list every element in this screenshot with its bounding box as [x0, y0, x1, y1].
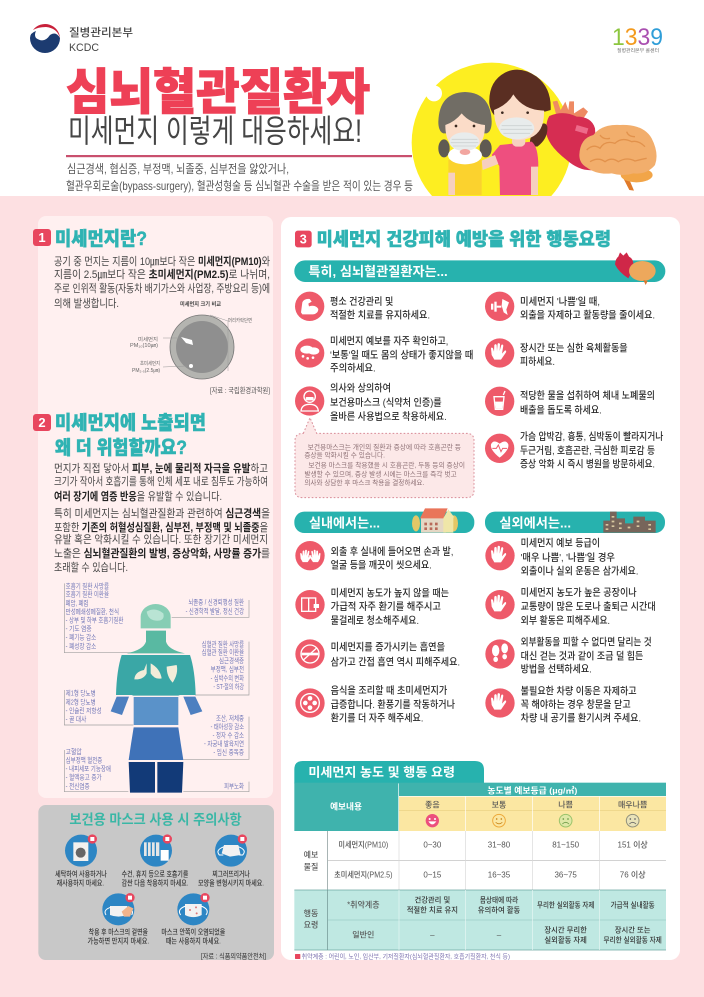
text block 1: 의해 발생합니다. [54, 296, 119, 310]
icon: face bad [559, 814, 572, 827]
label: pregnancy: 조산, 저체중 [216, 714, 244, 723]
icon: crumpled mask [215, 834, 247, 867]
tip: manage health: 적절한 치료를 유지하세요. [330, 308, 430, 321]
table rows: actions: 건강관리 및 [414, 896, 450, 905]
section 3 lower: indoor and outdoor [294, 508, 665, 725]
tip: forecast [295, 334, 473, 375]
badge 1: 1 [38, 230, 46, 245]
tip: mask with doctor: 보건용마스크 (식약처 인증)를 [330, 396, 442, 409]
tip: forecast: 미세먼지 예보를 자주 확인하고, [330, 334, 448, 347]
heading 3: 미세먼지 건강피해 예방을 위한 행동요령 [317, 230, 611, 250]
chart: particle size comparison: PM₂.₅(2.5㎛) [132, 368, 160, 374]
tip: water [485, 387, 655, 416]
panel: section 2 why dangerous [33, 412, 270, 574]
icon: hand [485, 688, 515, 718]
tip: no smoking: 삼가고 간접 흡연 역시 피해주세요. [331, 656, 460, 669]
callout: mask warning: 보건용 마스크를 착용했을 시 호흡곤란, 두통 등의 증상이 [308, 461, 465, 470]
callout: mask warning: 증상을 악화시킬 수 있습니다. [304, 451, 385, 460]
tip: ventilate: 물걸레로 청소해주세요. [331, 614, 419, 627]
table rows: actions: – [430, 931, 435, 940]
icon: soiled mask [177, 893, 210, 925]
table rows: actions: 행동 [304, 908, 318, 918]
label: diabetes: 제2형 당뇨병 [66, 697, 96, 706]
label: cardiovascular: 심혈관 질환 이환율 [202, 648, 244, 657]
table header: 좋음 [425, 800, 440, 809]
tip: manage health [295, 292, 430, 321]
tip: wash [295, 541, 453, 571]
text block 1 [54, 255, 270, 310]
child [438, 92, 492, 195]
badge 1 [33, 229, 51, 246]
table rows: actions: 가급적 실내활동 [611, 901, 655, 910]
label: respiratory [66, 581, 124, 650]
label: pregnancy: - 임신 중독증 [213, 748, 244, 757]
icon: emblem [30, 23, 60, 53]
tip: refrain outdoors: 미세먼지 예보 등급이 [521, 538, 600, 550]
source 1: [자료 : 국립환경과학원] [210, 385, 270, 395]
source: mask: [자료 : 식품의약품안전처] [201, 951, 266, 960]
label: respiratory: - 상부 및 하부 호흡기질환 [66, 616, 124, 625]
table footnote: 취약계층 : 어린이, 노인, 임산부, 기저질환자(심뇌혈관질환자, 호흡기질환자, 천식 등) [302, 952, 510, 961]
table header: 예보내용 [330, 801, 362, 812]
tip: vehicle: 불필요한 차량 이동은 자제하고 [521, 684, 637, 697]
table rows: pollutants: 미세먼지(PM10) [338, 840, 389, 850]
table tab heading: 미세먼지 농도 및 행동 요령 [308, 766, 455, 780]
table rows: pollutants: 0~30 [423, 841, 442, 850]
callout: mask warning: 발생할 수 있으며, 증상 발생 시에는 마스크를 즉각 벗고 [304, 470, 457, 479]
label: pregnancy [204, 714, 244, 757]
caution: covering: 감싼 다음 착용하지 마세요. [122, 878, 188, 887]
callout: mask warning: 의사와 상담한 후 마스크 착용을 결정하세요. [304, 478, 424, 487]
tip: mask with doctor: 의사와 상의하여 [330, 382, 391, 395]
tip: avoid roads: 교통량이 많은 도로나 출퇴근 시간대 [521, 600, 656, 613]
heading 2: 왜 더 위험할까요? [55, 437, 187, 459]
tip: manage health: 평소 건강관리 및 [330, 295, 393, 308]
label: respiratory: - 기도 염증 [66, 624, 92, 633]
icon: heart pulse [485, 434, 514, 463]
tip: mask with doctor [295, 382, 447, 423]
icon: washing hands [295, 541, 325, 570]
icon: stop hand [485, 338, 514, 368]
tip: avoid roads: 외부 활동은 피해주세요. [521, 614, 610, 627]
caution: covering: 수건, 휴지 등으로 호흡기를 [122, 869, 189, 878]
label: blood: - 내피세포 기능장애 [66, 764, 111, 773]
tip: reduce activity: 미세먼지 '나쁨'일 때, [520, 295, 600, 308]
tip: avoid roads: 미세먼지 농도가 높은 공장이나 [521, 586, 637, 599]
human body figure [111, 604, 202, 793]
label: diabetes [66, 689, 102, 724]
panel: section 1 what is fine dust [33, 228, 270, 395]
table rows: pollutants: 0~15 [423, 871, 442, 880]
caution: washing [55, 869, 107, 887]
table rows: pollutants: 초미세먼지(PM2.5) [334, 870, 393, 880]
table rows: actions: 장시간 또는 [615, 926, 651, 935]
tip: refrain outdoors: 외출이나 실외 운동은 삼가세요. [521, 565, 638, 577]
table rows: pollutants: 예보 [304, 850, 318, 860]
table rows: actions: *취약계층 [347, 900, 380, 910]
tip: cooking: 급증합니다. 환풍기를 작동하거나 [331, 698, 455, 711]
icon: window [295, 590, 325, 619]
table tab heading [294, 761, 484, 783]
label: diabetes: - 인슐린 저항성 [66, 706, 102, 715]
text block 2: 유발 혹은 악화시킬 수 있습니다. 또한 장기간 미세먼지 [54, 532, 268, 546]
table rows: pollutants: 76 이상 [620, 870, 646, 880]
tip: ventilate: 가급적 자주 환기를 해주시고 [331, 600, 441, 613]
subtitle: 미세먼지 이렇게 대응하세요! [68, 113, 362, 149]
tip: refrain outdoors [485, 538, 638, 577]
table rows: actions: 무리한 실외활동 자제 [603, 935, 662, 944]
label: blood: 고혈압 [66, 747, 82, 756]
caution: touching [87, 927, 149, 946]
tip: water: 적당한 물을 섭취하여 체내 노폐물의 [520, 389, 655, 402]
icon: fan [295, 688, 325, 718]
tip: reduce activity: 외출을 자제하고 활동량을 줄이세요. [520, 308, 655, 321]
table rows: actions [294, 890, 666, 950]
table header [294, 783, 666, 831]
icon: no smoking [295, 639, 325, 669]
tip: wash: 외출 후 실내에 들어오면 손과 발, [331, 546, 453, 558]
banner: patients: 특히, 심뇌혈관질환자는... [308, 263, 448, 279]
target description: 혈관우회로술(bypass-surgery), 혈관성형술 등 심뇌혈관 수술을 받은 적이 있는 경우 등 [66, 179, 413, 193]
heading 2: 미세먼지에 노출되면 [55, 412, 206, 434]
tip: vehicle [485, 684, 641, 725]
tip: ventilate [295, 588, 449, 627]
table rows: actions: 적절한 치료 유지 [407, 906, 458, 915]
caution: covering [122, 869, 189, 887]
text block 2 [54, 461, 270, 574]
heading 1: 미세먼지란? [55, 228, 147, 250]
label: brain: - 신경학적 발달, 정신 건강 [186, 606, 244, 615]
table rows: actions: 몸상태에 따라 [480, 896, 518, 905]
tip: avoid exercise [485, 338, 628, 368]
caution: touching: 착용 후 마스크의 겉면을 [89, 927, 148, 936]
caution: soiled [161, 927, 226, 946]
table rows: pollutants: 81~150 [552, 841, 580, 850]
label: blood: - 전신염증 [66, 781, 90, 790]
callout: mask warning [295, 418, 474, 498]
label: respiratory: 폐암, 폐렴 [66, 598, 88, 607]
panel: section 3 actions [281, 217, 680, 960]
banner: indoor [294, 508, 474, 533]
icon: footprints [485, 639, 515, 669]
banner: patients [294, 252, 665, 285]
table rows: actions: – [497, 931, 502, 940]
label: cardiovascular: - 심박수의 변화 [211, 673, 244, 682]
badge 3 [295, 231, 312, 247]
text block 1: 공기 중 먼지는 지름이 10㎛보다 작은 미세먼지(PM10)와 [54, 255, 270, 268]
table rows: actions: 일반인 [352, 930, 374, 940]
tip: forecast: '보통'일 때도 몸의 상태가 좋지않을 때 [330, 348, 473, 361]
tip: avoid exercise: 피하세요. [520, 355, 555, 368]
logo: 1339: 질병관리본부 콜센터 [617, 47, 659, 54]
label: cardiovascular: - ST-절의 하강 [213, 682, 244, 691]
tip: mask with doctor: 올바른 사용법으로 착용하세요. [330, 410, 447, 423]
chart: particle size comparison [130, 300, 252, 379]
title: 심뇌혈관질환자 [66, 66, 370, 120]
heading: mask cautions: 보건용 마스크 사용 시 주의사항 [69, 811, 242, 827]
table rows: actions: 유의하여 활동 [478, 906, 520, 915]
table: fine dust levels and action guide [294, 761, 666, 961]
caution: deforming: 찌그러뜨리거나 [212, 869, 250, 878]
icon: glass of water [485, 387, 514, 416]
caution: deforming: 모양을 변형시키지 마세요. [198, 878, 264, 887]
tip: symptoms [485, 430, 663, 470]
caution: touching: 가능하면 만지지 마세요. [87, 937, 149, 946]
icon: face normal [493, 814, 505, 827]
caution: soiled: 때는 사용하지 마세요. [166, 937, 221, 946]
chart: particle size comparison: 미세먼지 [138, 336, 158, 343]
callout: mask warning: 보건용마스크는 개인의 질환과 증상에 따라 호흡곤란 등 [308, 442, 461, 451]
tip: no smoking: 미세먼지를 증가시키는 흡연을 [331, 641, 445, 654]
label: cardiovascular: 심근경색증 [219, 656, 244, 665]
icon: arm [295, 292, 324, 321]
label: cardiovascular: 부정맥, 심부전 [211, 665, 244, 674]
text block 1: 지름이 2.5㎛보다 작은 초미세먼지(PM2.5)로 나뉘며, [54, 268, 270, 281]
panel: left column [38, 216, 273, 798]
icon: face good [426, 814, 439, 827]
tip: symptoms: 증상 악화 시 즉시 병원을 방문하세요. [520, 457, 655, 470]
label: skin: 피부노화 [224, 781, 244, 790]
text block 2: 초래할 수 있습니다. [54, 561, 128, 574]
tip: walk: 외부활동을 피할 수 없다면 달리는 것 [521, 636, 652, 649]
table rows: actions: 무리한 실외활동 자제 [537, 901, 595, 910]
icon: face very bad [626, 814, 639, 827]
tip: wash: 얼굴 등을 깨끗이 씻으세요. [331, 558, 432, 571]
banner: outdoor: 실외에서는... [499, 515, 571, 530]
logo: KCDC [30, 23, 133, 54]
tip: vehicle: 차량 내 공기를 환기시켜 주세요. [521, 712, 641, 725]
heading 2 [55, 412, 206, 459]
badge 2: 2 [38, 415, 46, 430]
chart: body organs and health effects [64, 581, 249, 793]
chart: particle size comparison: 머리카락단면 [228, 317, 252, 324]
label: blood: 심부정맥 혈전증 [66, 756, 103, 765]
tip: reduce activity [485, 292, 655, 321]
table rows: actions: 요령 [304, 921, 318, 930]
icon: towel and tissue [140, 834, 172, 867]
icon: washing machine [65, 834, 97, 867]
table rows: pollutants: 물질 [304, 861, 318, 871]
tip: vehicle: 꼭 해야하는 경우 창문을 닫고 [521, 698, 631, 711]
tip: avoid roads [485, 586, 656, 627]
section 3 upper: patients [294, 230, 665, 498]
caution: washing: 재사용하지 마세요. [57, 878, 104, 887]
tip: cooking: 환기를 더 자주 해주세요. [331, 712, 423, 725]
logo: 1339: 1339 [612, 24, 663, 51]
tip: symptoms: 가슴 압박감, 흉통, 심박동이 빨라지거나 [520, 430, 663, 443]
tip: walk: 방법을 선택하세요. [521, 663, 592, 676]
table rows: actions: 실외활동 자제 [544, 935, 587, 944]
label: respiratory: 호흡기 질환 사망률 [66, 581, 109, 590]
caution: washing: 세탁하여 사용하거나 [55, 869, 107, 878]
label: respiratory: - 폐성장 감소 [66, 641, 97, 650]
target description: 심근경색, 협심증, 부정맥, 뇌졸중, 심부전을 앓았거나, [67, 162, 289, 176]
tip: cooking: 음식을 조리할 때 초미세먼지가 [331, 684, 447, 697]
label: respiratory: - 폐기능 감소 [66, 632, 97, 641]
text block 2: 여러 장기에 염증 반응을 유발할 수 있습니다. [54, 489, 222, 503]
icon: masked person [295, 386, 324, 416]
icon: dumbbell [485, 292, 514, 321]
text block 2: 크기가 작아서 호흡기를 통해 인체 세포 내로 침투도 가능하여 [54, 474, 268, 488]
tip: forecast: 주의하세요. [330, 362, 376, 375]
logo: KCDC: KCDC [69, 42, 99, 54]
caution: soiled: 마스크 안쪽이 오염되었을 [161, 927, 226, 936]
illustration: patients with heart and brain [412, 62, 657, 196]
icon: touching mask [102, 893, 135, 925]
panel: mask cautions [38, 805, 274, 960]
tip: refrain outdoors: '매우 나쁨', '나쁨'일 경우 [521, 551, 615, 564]
table rows: pollutants [294, 831, 666, 890]
woman [482, 70, 551, 195]
leader lines [64, 583, 249, 792]
label: cardiovascular [202, 639, 244, 691]
label: pregnancy: - 자궁내 발육지연 [204, 739, 244, 748]
icon: hand [485, 590, 515, 619]
tip: walk [485, 636, 652, 676]
table rows: pollutants: 151 이상 [618, 840, 648, 850]
table header: 매우나쁨 [618, 799, 647, 809]
tip: water: 배출을 돕도록 하세요. [520, 403, 602, 416]
tip: avoid exercise: 장시간 또는 심한 육체활동을 [520, 342, 628, 355]
table header: 농도별 예보등급 (μg/㎥) [487, 784, 577, 795]
tip: cooking [295, 684, 455, 725]
label: diabetes: - 골 대사 [66, 715, 87, 724]
label: respiratory: 만성폐쇄성폐질환, 천식 [66, 607, 119, 616]
brain [579, 125, 657, 191]
label: cardiovascular: 심혈관 질환 사망률 [202, 639, 244, 648]
chart: particle size comparison: PM₁₀(10㎛) [130, 343, 158, 349]
icon: hand [485, 541, 515, 570]
tip: no smoking [295, 639, 460, 669]
text block 2: 포함한 기존의 허혈성심질환, 심부전, 부정맥 및 뇌졸중을 [54, 520, 268, 534]
caution: deforming [198, 869, 264, 887]
icon: cloud [295, 338, 324, 368]
label: respiratory: 호흡기 질환 이환율 [66, 590, 109, 599]
label: brain: 뇌졸중 / 신경퇴행성 질환 [188, 598, 244, 607]
table rows: pollutants: 31~80 [488, 841, 511, 850]
logo text: 질병관리본부 [69, 26, 133, 39]
text block 1: 주로 인위적 활동(자동차 배기가스와 사업장, 주방요리 등)에 [54, 281, 270, 295]
table header: 보통 [492, 800, 506, 809]
banner: indoor: 실내에서는... [309, 515, 380, 530]
label: brain [186, 598, 244, 615]
label: pregnancy: - 태아성장 감소 [211, 722, 244, 731]
label: diabetes: 제1형 당뇨병 [66, 689, 96, 698]
badge 2 [33, 414, 51, 431]
label: blood [66, 747, 111, 790]
tip: ventilate: 미세먼지 농도가 높지 않을 때는 [331, 588, 449, 600]
banner: outdoor [485, 512, 665, 533]
chart: particle size comparison: 미세먼지 크기 비교 [180, 300, 221, 308]
tip: walk: 대신 걷는 것과 같이 조금 덜 힘든 [521, 649, 643, 662]
table rows: pollutants: 36~75 [554, 871, 577, 880]
table rows: pollutants: 16~35 [488, 871, 511, 880]
text block 2: 먼지가 직접 닿아서 피부, 눈에 물리적 자극을 유발하고 [54, 461, 268, 475]
tip: symptoms: 두근거림, 호흡곤란, 극심한 피로감 등 [520, 444, 655, 457]
text block 2: 특히 미세먼지는 심뇌혈관질환과 관련하여 심근경색을 [54, 506, 270, 520]
badge 3: 3 [300, 233, 307, 247]
target description [66, 162, 413, 193]
table header: 나쁨 [558, 799, 573, 809]
heart [546, 101, 596, 170]
table rows: actions: 장시간 무리한 [544, 926, 587, 935]
label: pregnancy: - 정자 수 감소 [213, 731, 244, 740]
text block 2: 노출은 심뇌혈관질환의 발병, 증상악화, 사망률 증가를 [54, 546, 270, 560]
chart: particle size comparison: 초미세먼지 [140, 360, 160, 367]
label: blood: - 혈액응고 증가 [66, 773, 102, 782]
